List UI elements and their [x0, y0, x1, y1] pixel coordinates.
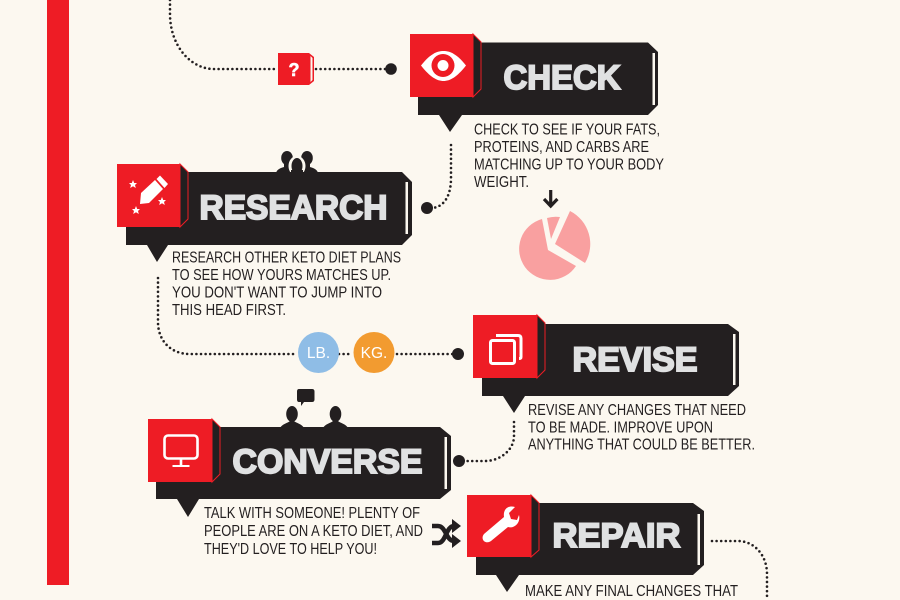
- text: converse body: THEY'D LOVE TO HELP YOU!: [204, 541, 377, 558]
- icon: research people: [276, 151, 318, 176]
- text: research body: TO SEE HOW YOURS MATCHES UP.: [172, 267, 391, 284]
- heading: revise: REVISE: [572, 341, 698, 379]
- text: research body: [172, 250, 401, 319]
- text: revise body: REVISE ANY CHANGES THAT NEED: [528, 402, 746, 419]
- text: check body: [474, 122, 664, 191]
- text: repair body: MAKE ANY FINAL CHANGES THAT: [525, 583, 738, 600]
- icon: wrench: [483, 507, 519, 542]
- text: revise body: ANYTHING THAT COULD BE BETTER.: [528, 436, 755, 454]
- icon: down arrow: [544, 190, 557, 206]
- text: research body: YOU DON'T WANT TO JUMP INTO: [172, 284, 382, 302]
- badge: KG.: KG.: [361, 345, 387, 362]
- icon: shuffle arrows: [432, 519, 461, 548]
- icon: eye: [421, 51, 466, 81]
- connector: check to research: [421, 145, 451, 214]
- icon: monitor: [164, 436, 198, 466]
- icon: copy squares: [490, 336, 521, 364]
- text: research body: RESEARCH OTHER KETO DIET PLANS: [172, 250, 401, 266]
- text: converse body: TALK WITH SOMEONE! PLENTY OF: [204, 505, 420, 522]
- text: revise body: TO BE MADE. IMPROVE UPON: [528, 420, 713, 436]
- chart: pie: [519, 211, 590, 280]
- connector: research to revise: [158, 278, 464, 360]
- text: revise body: [528, 402, 755, 454]
- badge: KG.: [354, 332, 394, 373]
- connector: repair downward: [712, 541, 767, 600]
- icon: question box: [278, 53, 314, 85]
- panel: repair: [467, 495, 704, 592]
- heading: check: CHECK: [504, 59, 621, 97]
- heading: research: RESEARCH: [200, 189, 388, 227]
- icon: question box: ?: [288, 60, 300, 80]
- heading: repair: REPAIR: [552, 517, 680, 555]
- red vertical bar: [47, 0, 69, 585]
- text: check body: WEIGHT.: [474, 174, 529, 191]
- text: check body: CHECK TO SEE IF YOUR FATS,: [474, 122, 660, 138]
- text: converse body: [204, 505, 423, 558]
- panel: check: [410, 34, 658, 132]
- icon: converse people: [280, 389, 348, 428]
- badge: LB.: [298, 332, 339, 373]
- panel: converse: [148, 419, 451, 517]
- text: research body: THIS HEAD FIRST.: [172, 302, 286, 319]
- text: check body: PROTEINS, AND CARBS ARE: [474, 139, 649, 156]
- panel: research: [117, 164, 412, 262]
- connector: top line to check: [170, 0, 397, 75]
- text: check body: MATCHING UP TO YOUR BODY: [474, 156, 664, 174]
- connector: revise to converse: [453, 422, 514, 467]
- icon: pencil and stars: [129, 176, 168, 214]
- text: converse body: PEOPLE ARE ON A KETO DIET, AND: [204, 523, 423, 540]
- badge: LB.: LB.: [307, 345, 330, 362]
- panel: revise: [473, 315, 739, 413]
- heading: converse: CONVERSE: [232, 443, 422, 481]
